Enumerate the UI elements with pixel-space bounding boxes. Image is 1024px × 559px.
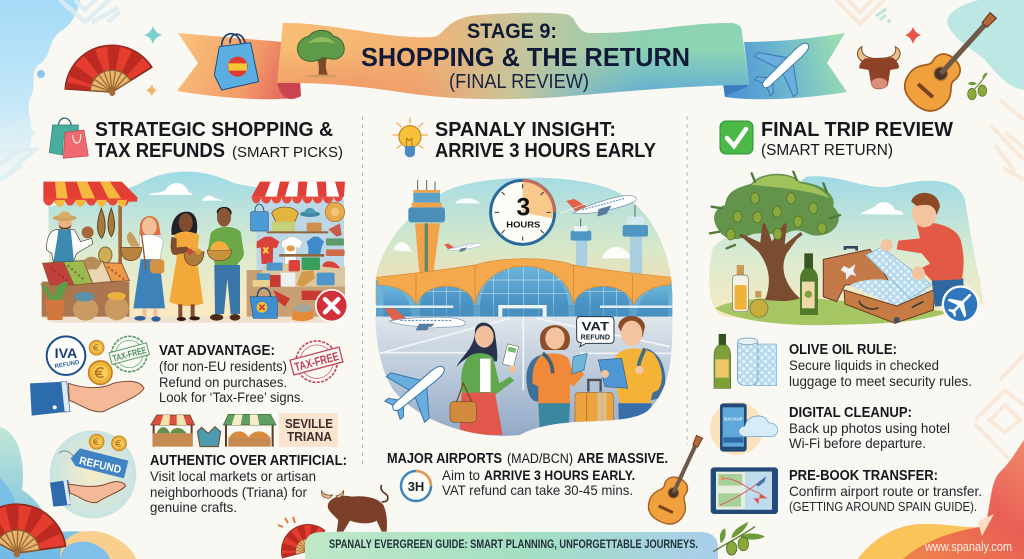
title text: (FINAL REVIEW): [449, 71, 589, 93]
rolling suitcase: [574, 378, 614, 422]
text: major airports: Aim to: [442, 468, 480, 483]
VAT refund speech bubble: [577, 317, 614, 347]
text: digital cleanup: DIGITAL CLEANUP:: [789, 405, 912, 421]
IVA refund badge: IVA: [55, 345, 77, 361]
text: digital cleanup: Wi-Fi before departure.: [789, 436, 926, 451]
text: digital cleanup: Back up photos using hotel: [789, 421, 950, 436]
illustration: airport scene: [374, 178, 672, 436]
airplane taking off: [566, 183, 638, 223]
clock: 3 hours: 3: [516, 194, 530, 221]
icon: refund tag with hand: [50, 430, 136, 518]
traveler with green jacket: [450, 323, 519, 435]
text: pre-book transfer: (GETTING AROUND SPAIN GUIDE).: [789, 499, 977, 514]
footer banner: [305, 532, 718, 559]
clock: 3 hours: [491, 180, 555, 244]
terminal building: [376, 259, 673, 317]
icon: olive tree: [297, 30, 344, 77]
title text: STAGE 9:: [467, 20, 557, 43]
icon: tablet map: [711, 467, 778, 514]
text: VAT advantage: VAT ADVANTAGE:: [159, 343, 275, 359]
VAT refund speech bubble: VAT: [582, 320, 610, 334]
heading: final trip review: [761, 119, 953, 159]
market stall left: [40, 182, 137, 321]
IVA refund badge: REFUND: [54, 360, 81, 370]
text: authentic over artificial: neighborhoods (Triana) for: [150, 485, 307, 500]
text: VAT advantage: [159, 343, 304, 405]
traveler with orange sweater: [526, 325, 587, 437]
heading: final trip review: FINAL TRIP REVIEW: [761, 119, 953, 141]
panel: Spanaly insight: [374, 117, 672, 502]
text: olive oil rule: Secure liquids in checked: [789, 358, 939, 373]
text: VAT advantage: (for non-EU residents): [159, 359, 287, 374]
icon: bull head: [857, 47, 900, 89]
icon: red X badge: [315, 289, 348, 322]
souvenir stall right: [247, 182, 345, 321]
title banner: [177, 13, 847, 108]
heading: Spanaly insight: SPANALY INSIGHT:: [435, 119, 616, 141]
icon: 3H clock badge: [401, 471, 431, 501]
text: digital cleanup: [789, 405, 950, 451]
icon: olive oil bottle and bubble wrap: [714, 334, 777, 388]
icon: hand with coins and stamps: [30, 332, 153, 416]
icon: red fan bottom left: [0, 497, 71, 559]
text: major airports: [387, 451, 668, 498]
label: Seville Triana: SEVILLE: [285, 416, 333, 431]
icon: guitar top right: [897, 0, 1011, 119]
illustration: market scene: [40, 172, 348, 323]
icon: red tax-free stamp: [287, 335, 346, 388]
text: olive oil rule: OLIVE OIL RULE:: [789, 342, 897, 358]
olive tree: [710, 172, 840, 301]
heading: strategic shopping: TAX REFUNDS: [95, 140, 225, 162]
icon: mini market stalls: [151, 414, 276, 447]
icon: shopping bags: [49, 118, 88, 158]
panel: strategic shopping and tax refunds: [30, 118, 348, 518]
text: pre-book transfer: PRE-BOOK TRANSFER:: [789, 468, 938, 484]
title text: SHOPPING & THE RETURN: [361, 44, 690, 72]
illustration: olive tree and packing: [709, 172, 983, 325]
heading: final trip review: (SMART RETURN): [761, 142, 893, 159]
text: major airports: VAT refund can take 30-45 mins.: [442, 483, 633, 498]
text: pre-book transfer: Confirm airport route or transfer.: [789, 484, 982, 499]
far control towers: [571, 205, 648, 275]
text: VAT advantage: Refund on purchases.: [159, 375, 287, 390]
terminal, apron and travelers: [375, 258, 672, 436]
icon: olive branch bottom: [713, 522, 765, 555]
open suitcase with bubble wrap: [823, 247, 935, 323]
website url: www.spanaly.com: [924, 540, 1012, 554]
vendor: [47, 211, 94, 262]
text: olive oil rule: [789, 342, 972, 389]
icon: guitar bottom center: [643, 429, 716, 529]
text: major airports: ARRIVE 3 HOURS EARLY.: [484, 467, 635, 483]
traveler with yellow sweater: [598, 316, 666, 420]
text: major airports: MAJOR AIRPORTS: [387, 451, 502, 467]
icon: red tax-free stamp: TAX-FREE: [293, 349, 340, 374]
text: major airports: ARE MASSIVE.: [577, 451, 668, 467]
icon: red fan top left: [57, 36, 156, 107]
heading: Spanaly insight: ARRIVE 3 HOURS EARLY: [435, 140, 657, 162]
label: Seville Triana: TRIANA: [287, 429, 333, 444]
main control tower: [408, 180, 445, 273]
IVA refund badge: [47, 336, 85, 375]
icon: olive sprig top right: [968, 73, 987, 100]
oil bottles: [733, 253, 818, 317]
shopper with green shirt: [207, 207, 244, 321]
icon: phone and cloud: [710, 402, 778, 455]
text: authentic over artificial: Visit local markets or artisan: [150, 469, 316, 484]
icon: green check mark: [720, 121, 753, 154]
green tax-free stamp: TAX-FREE: [111, 345, 147, 364]
text: olive oil rule: luggage to meet security rules.: [789, 374, 972, 389]
man packing: [881, 193, 964, 307]
VAT refund speech bubble: REFUND: [581, 334, 610, 341]
icon: refund tag with hand: REFUND: [78, 455, 122, 476]
text: authentic over artificial: [150, 453, 347, 515]
heading: strategic shopping: [95, 119, 343, 162]
icon: plane badge: [942, 285, 980, 323]
icon: bull: [321, 485, 388, 532]
icon: airplane on banner: [743, 24, 827, 108]
icon: light bulb: [393, 117, 428, 157]
parked airplane: [385, 308, 465, 330]
heading: strategic shopping: (SMART PICKS): [232, 144, 343, 161]
heading: strategic shopping: STRATEGIC SHOPPING &: [95, 119, 333, 141]
shopper in yellow dress: [169, 212, 204, 321]
clock: 3 hours: HOURS: [506, 220, 541, 230]
heading: Spanaly insight: [435, 119, 657, 162]
icon: small red fan with sparks: [272, 515, 330, 559]
column dividers: [362, 116, 687, 466]
icon: shopping bag with Spanish flag: [214, 34, 259, 90]
sky: [374, 178, 672, 304]
text: authentic over artificial: genuine crafts.: [150, 500, 237, 515]
text: VAT advantage: Look for ‘Tax-Free’ signs.: [159, 390, 304, 405]
footer banner: SPANALY EVERGREEN GUIDE: SMART PLANNING, UNFORGETTABLE JOURNEYS.: [329, 539, 698, 551]
title text: [361, 20, 690, 93]
small distant airplane: [444, 238, 481, 254]
airplane foreground: [373, 345, 463, 433]
label: Seville Triana: [279, 413, 338, 447]
text: major airports: (MAD/BCN): [507, 451, 573, 466]
shopper in blue skirt: [121, 216, 165, 322]
text: pre-book transfer: [789, 468, 982, 514]
icon: 3H clock badge: 3H: [408, 479, 424, 494]
text: authentic over artificial: AUTHENTIC OVER ARTIFICIAL:: [150, 453, 347, 469]
panel: final trip review: [709, 119, 983, 514]
icon: phone and cloud: BACKUP: [724, 417, 743, 422]
